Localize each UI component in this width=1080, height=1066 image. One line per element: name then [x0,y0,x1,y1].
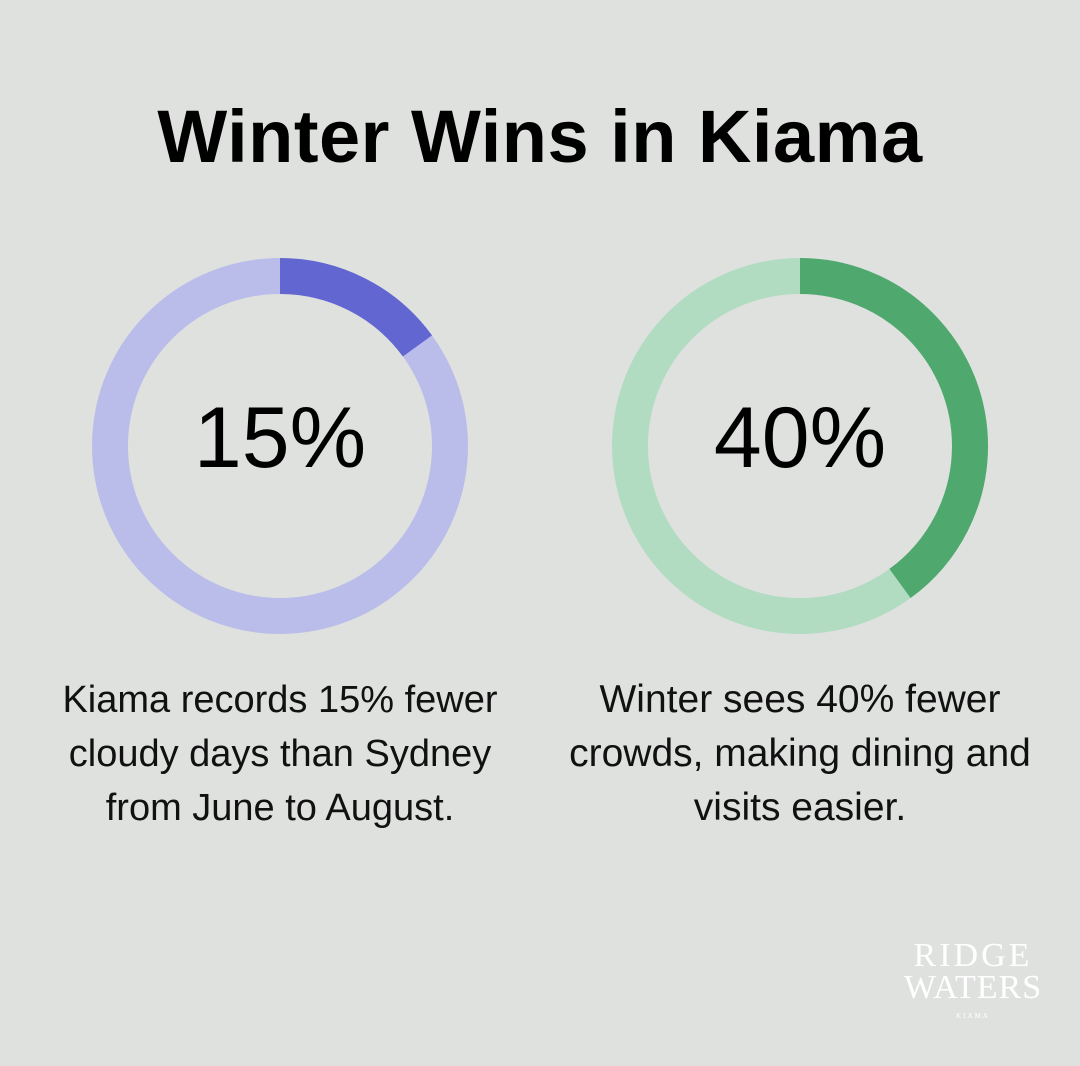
logo: RIDGE [914,937,1032,974]
caption left [62,679,498,829]
percentage 15%: 15% [194,390,366,486]
caption right: Winter sees 40% fewer [600,678,1000,721]
donut: 40% [612,258,988,634]
caption left: from June to August. [106,787,454,829]
donut: 15% [92,258,468,634]
logo: WATERS [904,969,1042,1006]
logo [904,937,1042,1020]
caption left: cloudy days than Sydney [69,733,491,775]
caption right: crowds, making dining and [569,732,1031,775]
percentage 40%: 40% [714,390,886,486]
logo: KIAMA [956,1012,990,1020]
caption right [569,678,1031,829]
caption right: visits easier. [694,786,906,829]
title: Winter Wins in Kiama [157,95,923,178]
caption left: Kiama records 15% fewer [62,679,498,721]
